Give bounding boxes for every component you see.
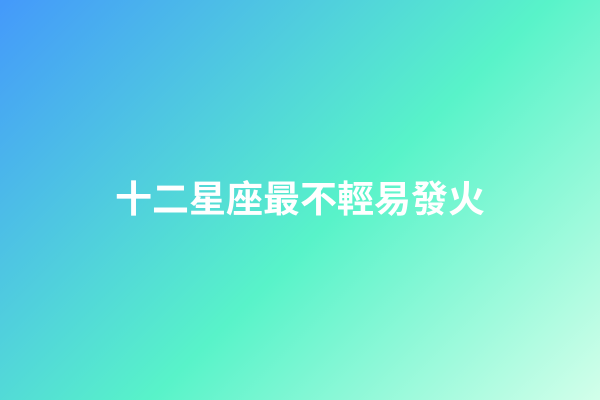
title: 十二星座最不輕易發火 [115,179,485,220]
